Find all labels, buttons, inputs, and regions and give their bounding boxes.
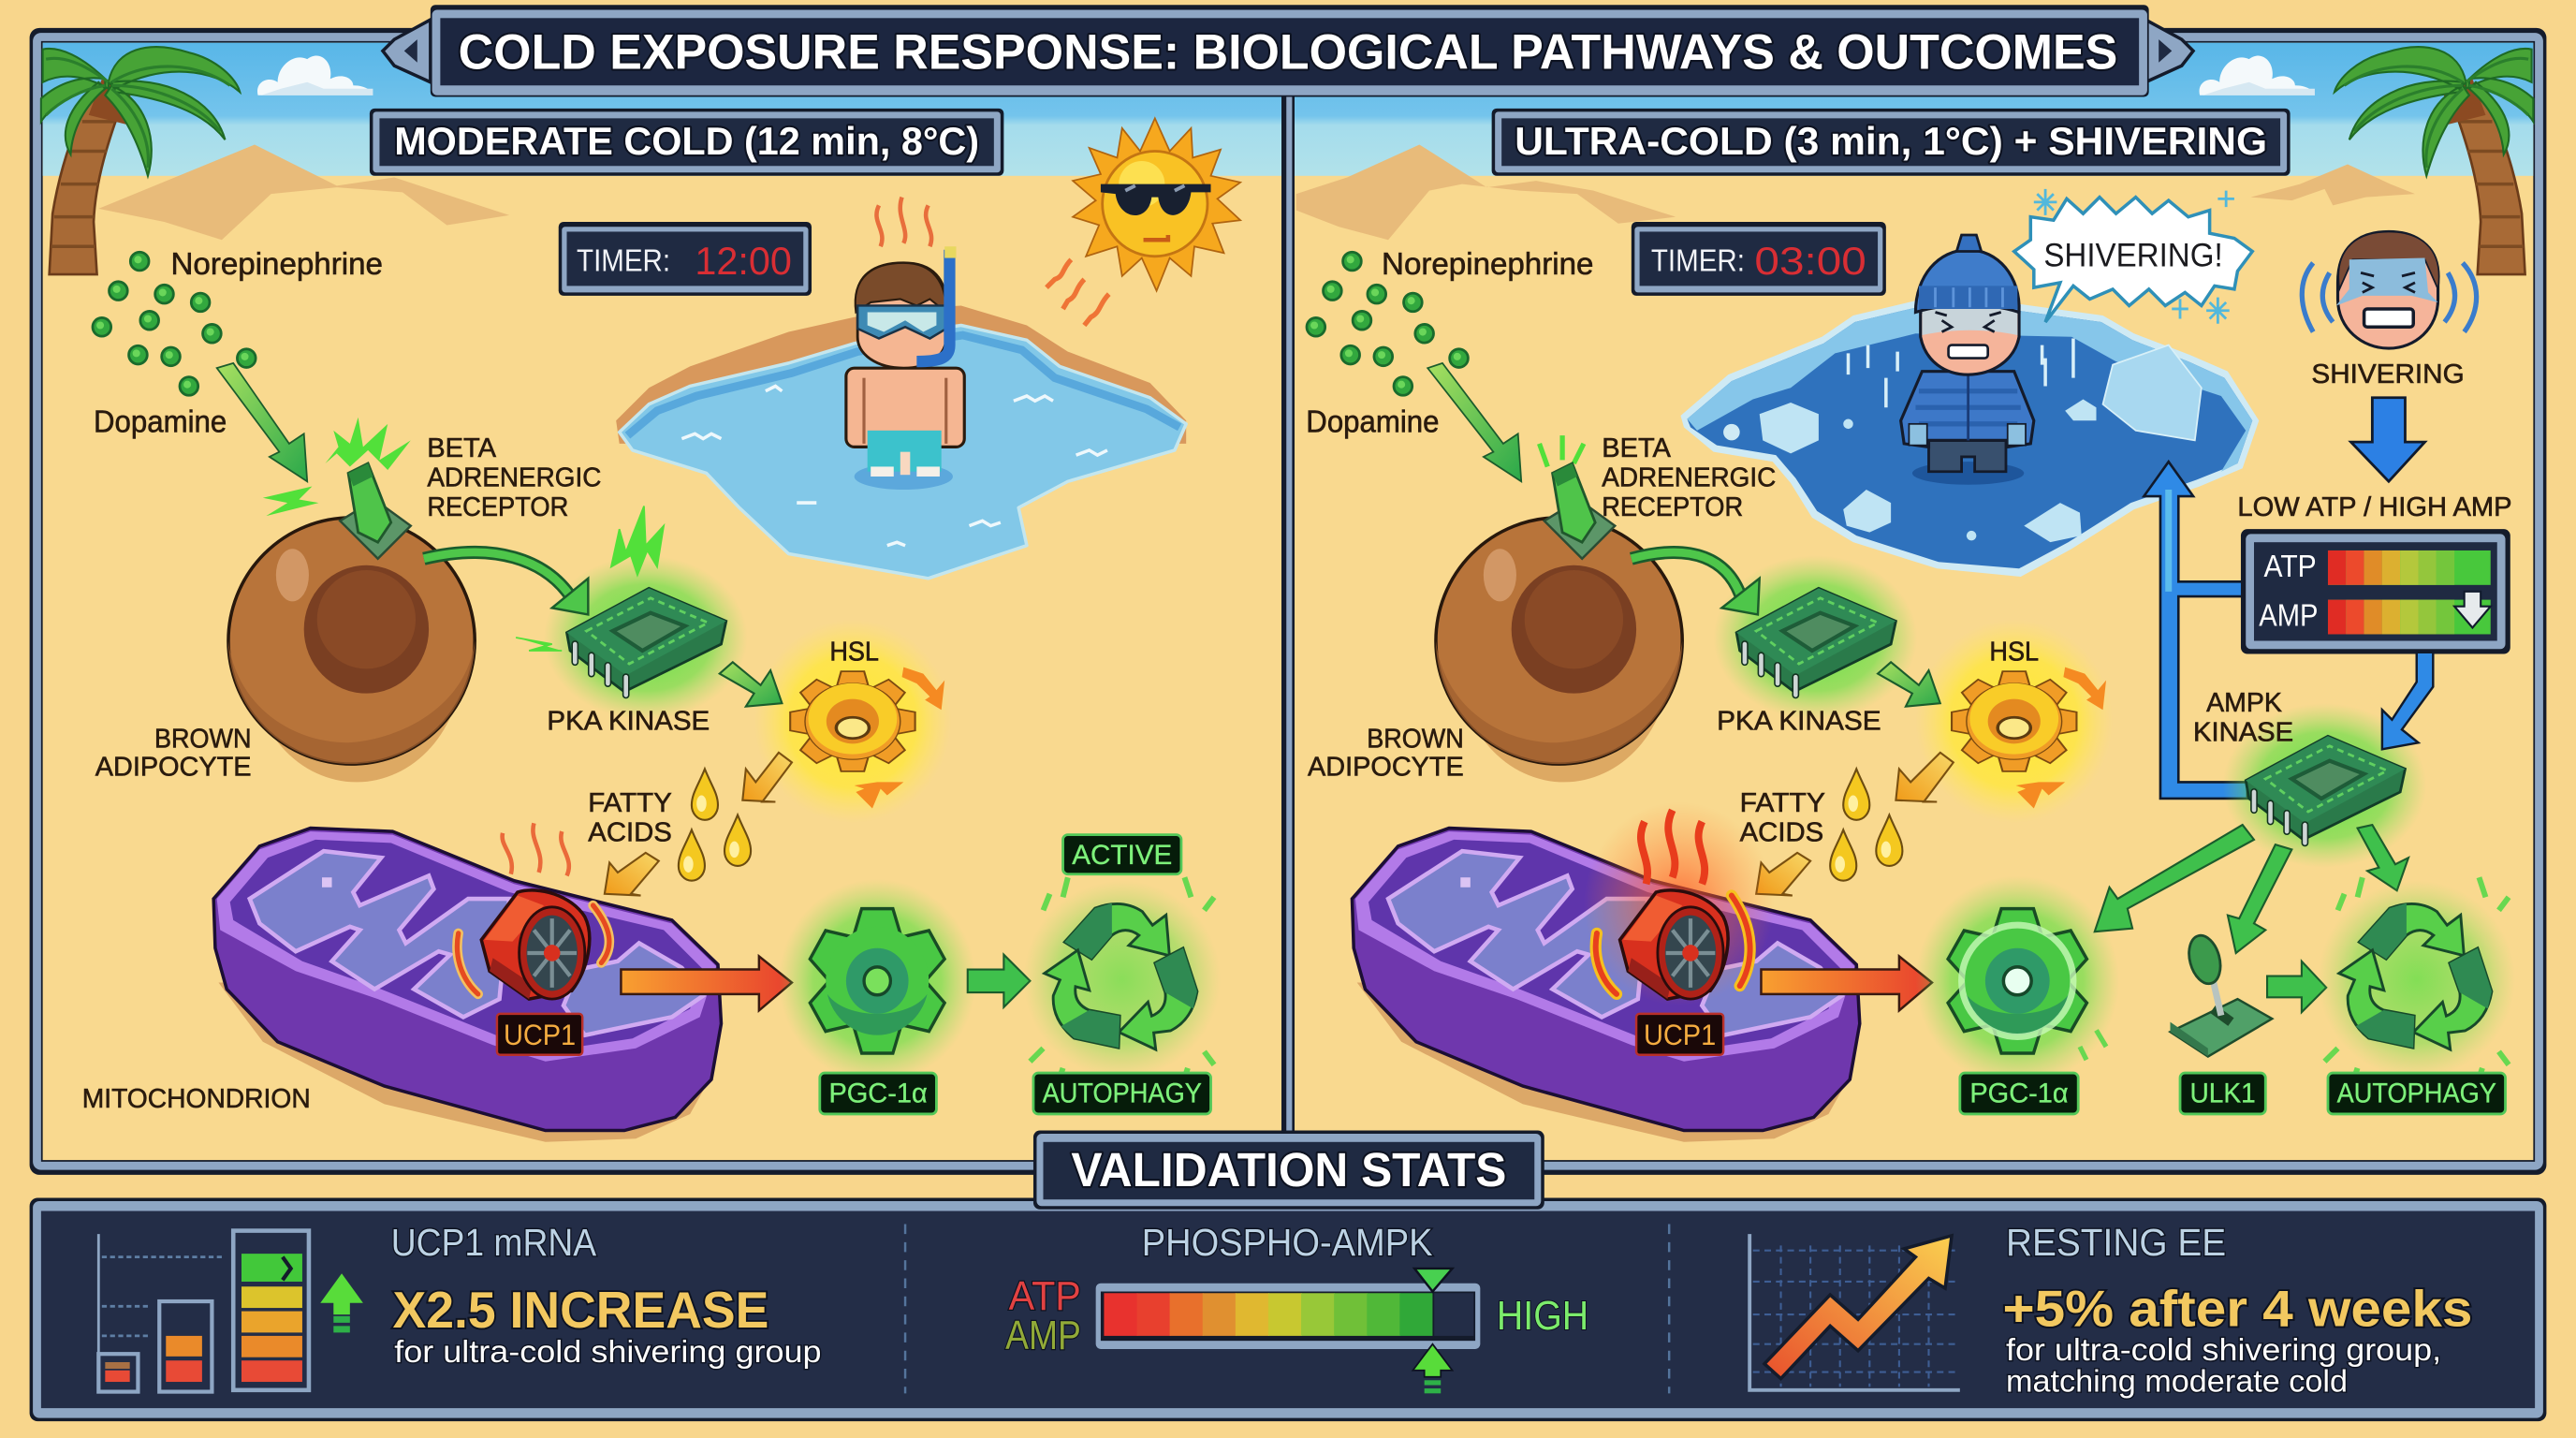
label: fatty acids: ACIDS xyxy=(588,818,672,848)
illustration: ice pool xyxy=(1680,301,2259,577)
timer: 03:00: 03:00 xyxy=(1754,239,1866,283)
dunes xyxy=(1296,144,2415,240)
icon: heat glow xyxy=(1584,801,1775,1005)
arrow: ucp1 to pgc-1a xyxy=(1761,956,1932,1010)
label: autophagy xyxy=(2328,1073,2506,1114)
arrow: neurotransmitter to receptor xyxy=(1427,363,1521,481)
icon: pgc-1a gear xyxy=(779,879,976,1083)
icon: autophagy recycle xyxy=(1023,877,1221,1088)
character: person in puffer jacket xyxy=(1901,235,2034,485)
panel: ultra-cold xyxy=(1295,43,2533,1160)
icon: ulk1 joystick xyxy=(2170,932,2272,1057)
label: beta adrenergic receptor xyxy=(1602,433,1776,522)
arrow: pka to hsl xyxy=(720,662,782,707)
arrow: receptor to pka xyxy=(424,552,588,614)
label: beta adrenergic receptor: BETA xyxy=(1602,433,1672,463)
timer: 03:00 xyxy=(1632,222,1886,296)
label: pgc-1a: PGC-1α xyxy=(828,1078,928,1109)
icon: ampk kinase chip xyxy=(2223,703,2426,868)
title banner xyxy=(383,5,2193,97)
chart: resting ee trend xyxy=(1749,1234,1960,1390)
label: active: ACTIVE xyxy=(1072,840,1172,871)
icon: receptor sparks xyxy=(263,418,411,516)
label: norepinephrine: Norepinephrine xyxy=(1382,247,1593,282)
gauge: atp amp: AMP xyxy=(2259,599,2318,634)
illustration: brown adipocyte xyxy=(1436,518,1682,782)
subheading: ultra-cold xyxy=(1492,109,2291,176)
arrow: gauge to ampk xyxy=(2382,653,2433,749)
stat: +5% after 4 weeks: +5% after 4 weeks xyxy=(2002,1280,2472,1337)
label: ulk1: ULK1 xyxy=(2190,1078,2256,1109)
molecules: norepinephrine and dopamine xyxy=(1307,252,1468,395)
stat: x2.5 increase: X2.5 INCREASE xyxy=(392,1282,768,1339)
label: hsl: HSL xyxy=(1989,638,2039,668)
label: shivering: SHIVERING xyxy=(2311,360,2465,389)
icon: autophagy recycle xyxy=(2318,877,2515,1088)
label: beta adrenergic receptor: ADRENERGIC xyxy=(1602,463,1776,493)
palm tree xyxy=(41,47,240,274)
arrow: neurotransmitter to receptor xyxy=(217,363,307,481)
subheading: ultra-cold: ULTRA-COLD (3 min, 1°C) + SHIVERING xyxy=(1515,119,2267,163)
heading: resting ee: RESTING EE xyxy=(2006,1221,2226,1264)
subheading: moderate cold xyxy=(370,109,1003,176)
label: high: HIGH xyxy=(1497,1293,1588,1339)
palm tree xyxy=(2334,47,2533,274)
arrow: ampk to autophagy xyxy=(2358,825,2408,890)
arrow: fatty acids to ucp1 xyxy=(605,853,659,896)
label: fatty acids xyxy=(1740,788,1825,848)
timer: 03:00: TIMER: xyxy=(1651,244,1745,279)
label: pka kinase: PKA KINASE xyxy=(547,706,710,736)
icon: snowflakes xyxy=(2034,189,2234,324)
icon: ucp1 turbine xyxy=(1596,890,1750,999)
label: beta adrenergic receptor: ADRENERGIC xyxy=(427,463,601,493)
label: active xyxy=(1063,835,1181,874)
caption: resting ee xyxy=(2006,1333,2441,1400)
label: mitochondrion: MITOCHONDRION xyxy=(82,1084,311,1114)
label: atp amp: AMP xyxy=(1005,1313,1081,1358)
label: fatty acids: ACIDS xyxy=(1740,818,1823,848)
icon: sun with sunglasses xyxy=(1073,118,1240,291)
timer: 12:00: 12:00 xyxy=(695,239,792,283)
arrow: shivering to atp gauge xyxy=(2351,398,2425,481)
icon: ucp1 heat waves xyxy=(1641,810,1705,884)
label: ampk kinase: AMPK xyxy=(2206,688,2282,718)
illustration: water pool xyxy=(616,305,1186,579)
icon: steam above swimmer xyxy=(876,198,931,246)
label: pka kinase: PKA KINASE xyxy=(1717,706,1881,736)
label: fatty acids: FATTY xyxy=(588,788,672,818)
chart: ucp1 bars xyxy=(98,1231,309,1392)
icon: sun heat waves xyxy=(1046,259,1109,326)
panel: pathways frame xyxy=(30,28,2546,1175)
subheading: moderate cold: MODERATE COLD (12 min, 8°C) xyxy=(394,119,979,163)
icon: ucp1 heat waves xyxy=(503,823,569,875)
icon: beta receptor xyxy=(1544,463,1615,559)
icon: hsl gear xyxy=(754,620,951,823)
character: shivering face xyxy=(2336,231,2439,348)
molecules: norepinephrine and dopamine xyxy=(93,252,256,395)
cloud xyxy=(257,56,373,95)
label: ampk kinase xyxy=(2193,688,2293,748)
label: pgc-1a xyxy=(820,1073,936,1114)
label: brown adipocyte: ADIPOCYTE xyxy=(95,752,252,782)
icon: fatty acid drops xyxy=(679,769,751,881)
label: atp amp xyxy=(1005,1273,1081,1358)
label: fatty acids xyxy=(588,788,672,848)
label: pgc-1a: PGC-1α xyxy=(1969,1078,2069,1109)
dunes xyxy=(98,144,509,240)
heading: ucp1 mrna: UCP1 mRNA xyxy=(391,1221,596,1264)
icon: pgc-1a bright gear xyxy=(1915,875,2119,1086)
title banner: COLD EXPOSURE RESPONSE: BIOLOGICAL PATHWAYS & OUTCOMES xyxy=(459,25,2117,81)
icon: shaking lines xyxy=(2302,263,2477,332)
label: brown adipocyte xyxy=(1308,725,1464,782)
label: autophagy: AUTOPHAGY xyxy=(2337,1078,2496,1109)
label: ulk1 xyxy=(2180,1073,2265,1114)
arrow: ampk to ulk1 xyxy=(2228,844,2291,953)
label: low atp high amp: LOW ATP / HIGH AMP xyxy=(2237,492,2512,522)
panel: validation stats xyxy=(30,1197,2546,1421)
arrow: hsl to fatty acids xyxy=(742,753,792,801)
arrow: ulk1 to autophagy xyxy=(2267,961,2326,1012)
label: pgc-1a xyxy=(1960,1073,2078,1114)
label: dopamine: Dopamine xyxy=(94,405,227,440)
icon: ucp1 turbine xyxy=(457,890,609,999)
icon: pka kinase chip xyxy=(1714,555,1917,720)
icon: beta receptor xyxy=(340,463,411,559)
icon: fatty acid drops xyxy=(1830,769,1902,881)
cloud xyxy=(2200,56,2315,95)
icon: hsl rotation arrows xyxy=(855,668,944,809)
icon: marker up xyxy=(1412,1344,1453,1393)
illustration: brown adipocyte xyxy=(228,518,475,782)
label: brown adipocyte: BROWN xyxy=(154,725,252,755)
gauge: atp amp xyxy=(2241,529,2510,654)
panel: moderate cold xyxy=(41,43,1281,1160)
arrow: ampk to pgc-1a xyxy=(2095,825,2254,932)
label: beta adrenergic receptor xyxy=(427,433,601,522)
callout: shivering speech bubble: SHIVERING! xyxy=(2043,237,2223,273)
label: hsl: HSL xyxy=(829,638,879,668)
label: brown adipocyte xyxy=(95,725,252,782)
label: autophagy: AUTOPHAGY xyxy=(1043,1078,1202,1109)
arrow: pka to hsl xyxy=(1878,662,1940,707)
icon: receptor sparks xyxy=(1540,435,1584,466)
heading tab: validation stats: VALIDATION STATS xyxy=(1071,1143,1506,1196)
arrow: hsl to fatty acids xyxy=(1895,753,1954,801)
arrow: ucp1 to pgc-1a xyxy=(621,956,792,1010)
caption: resting ee: matching moderate cold xyxy=(2006,1365,2348,1400)
gauge: atp amp: ATP xyxy=(2264,550,2317,584)
icon: trend arrow xyxy=(1764,1236,1952,1379)
illustration: mitochondrion xyxy=(1352,829,1860,1142)
arrow: receptor to pka xyxy=(1632,552,1760,614)
arrow: fatty acids to ucp1 xyxy=(1756,853,1810,896)
label: brown adipocyte: ADIPOCYTE xyxy=(1308,752,1464,782)
heading: phospho-ampk: PHOSPHO-AMPK xyxy=(1142,1221,1433,1264)
label: norepinephrine: Norepinephrine xyxy=(171,247,383,282)
label: beta adrenergic receptor: RECEPTOR xyxy=(1602,492,1743,522)
illustration: mitochondrion xyxy=(213,829,721,1142)
label: fatty acids: FATTY xyxy=(1740,788,1825,818)
timer: 12:00 xyxy=(559,222,812,296)
divider xyxy=(905,1225,1669,1393)
label: autophagy xyxy=(1033,1073,1211,1114)
icon: pka sparks xyxy=(516,506,664,651)
icon: hsl rotation arrows xyxy=(2016,668,2106,809)
timer: 12:00: TIMER: xyxy=(577,244,670,279)
label: beta adrenergic receptor: BETA xyxy=(427,433,497,463)
icon: pka kinase chip xyxy=(544,555,748,720)
label: ucp1: UCP1 xyxy=(504,1018,576,1051)
label: beta adrenergic receptor: RECEPTOR xyxy=(427,492,568,522)
icon: hsl gear xyxy=(1915,620,2113,823)
character: snorkeler xyxy=(846,246,964,490)
callout: shivering speech bubble xyxy=(2014,198,2252,322)
label: brown adipocyte: BROWN xyxy=(1367,725,1464,755)
arrow: ucp1 increase xyxy=(320,1273,363,1332)
label: dopamine: Dopamine xyxy=(1306,405,1439,440)
caption: ucp1: for ultra-cold shivering group xyxy=(394,1335,822,1370)
label: ucp1: UCP1 xyxy=(1644,1018,1716,1051)
gauge: phospho-ampk xyxy=(1096,1269,1480,1393)
label: ampk kinase: KINASE xyxy=(2193,718,2293,748)
arrow: gauge to pool and ampk xyxy=(2144,462,2247,799)
icon: marker down xyxy=(1414,1269,1453,1292)
caption: resting ee: for ultra-cold shivering group, xyxy=(2006,1333,2441,1368)
arrow: pgc-1a to autophagy xyxy=(968,955,1030,1007)
heading tab: validation stats xyxy=(1033,1131,1544,1210)
label: atp amp: ATP xyxy=(1009,1273,1081,1319)
